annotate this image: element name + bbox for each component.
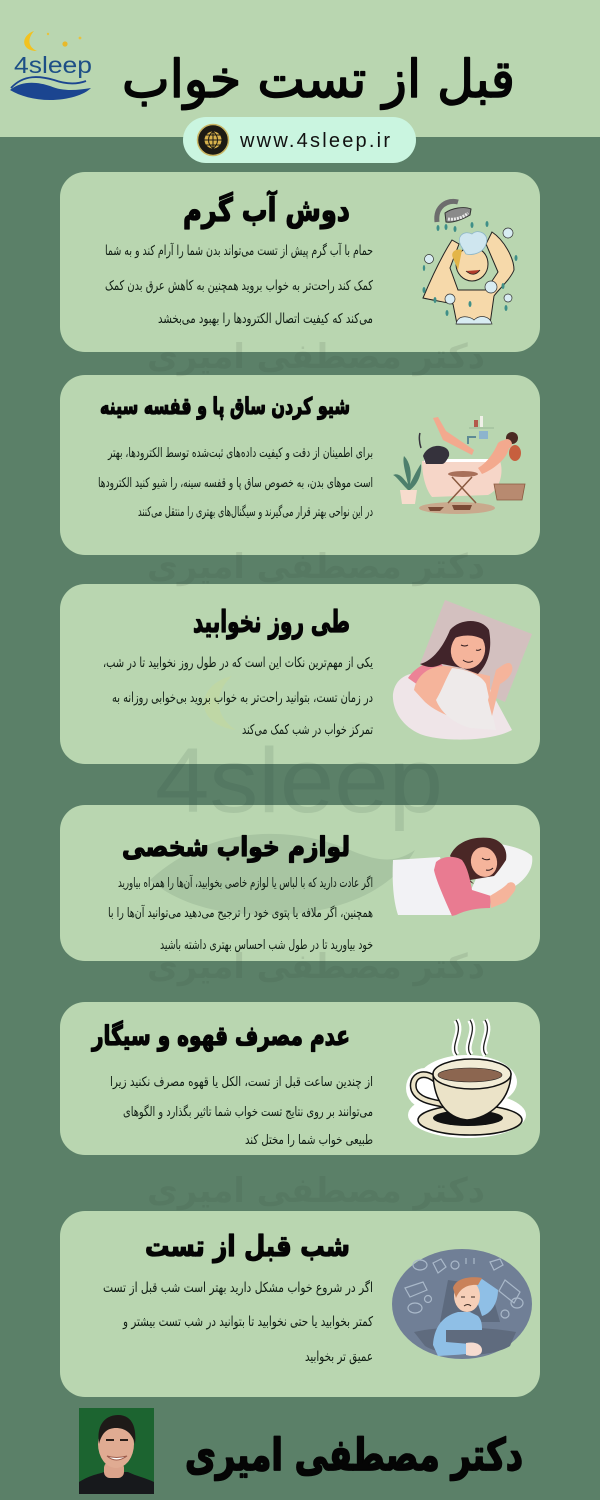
text: hot shower: می‌کند که کیفیت اتصال الکترودها را بهبود می‌بخشد (158, 311, 373, 327)
text: shaving (98, 446, 373, 520)
website address: www.4sleep.ir (239, 130, 390, 152)
watermark: large 4sleep logo: 4sleep (155, 730, 443, 832)
icon: woman sleeping under blanket (393, 838, 532, 916)
text: no coffee or cigarettes: می‌توانند بر روی نتایج تست خواب شما تاثیر بگذارد و الگوهای (123, 1104, 373, 1120)
text: personal sleep items: اگر عادت دارید که با لباس یا لوازم خاصی بخوابید، آن‌ها را همراه بیاورید (118, 874, 373, 891)
logo: 4sleep: 4sleep (14, 52, 92, 78)
panel: hot shower (60, 172, 540, 352)
watermark: author name repeats: دکتر مصطفی امیری (147, 1171, 485, 1211)
panel: shaving (60, 375, 540, 555)
header band (0, 0, 600, 137)
text: hot shower (105, 242, 373, 327)
website pill (183, 117, 416, 163)
watermark: large 4sleep logo (150, 676, 443, 915)
text: no daytime naps: یکی از مهم‌ترین نکات این است که در طول روز نخوابید تا در شب، (103, 655, 373, 671)
text: shaving: در این نواحی بهتر قرار می‌گیرند و سیگنال‌های بهتری را منتقل می‌کنند (138, 504, 373, 520)
icon: sleeping woman on pillow (393, 600, 532, 740)
watermark: author name repeats (147, 337, 485, 1211)
text: no daytime naps: تمرکز خواب در شب کمک می‌کند (242, 722, 373, 738)
text: shaving: است موهای بدن، به خصوص ساق پا و قفسه سینه، را شیو کنید الکترودها (98, 476, 373, 491)
heading: shaving: شیو کردن ساق پا و قفسه سینه (100, 394, 350, 420)
panel: no coffee or cigarettes (60, 1002, 540, 1155)
text: shaving: برای اطمینان از دقت و کیفیت داده‌های ثبت‌شده توسط الکترودها، بهتر (107, 446, 373, 461)
watermark: author name repeats: دکتر مصطفی امیری (147, 337, 485, 377)
heading: personal sleep items: لوازم خواب شخصی (122, 832, 350, 863)
panel: personal sleep items (60, 805, 540, 961)
text: no coffee or cigarettes: از چندین ساعت قبل از تست، الکل یا قهوه مصرف نکنید زیرا (110, 1075, 373, 1090)
panel: night before the test (60, 1211, 540, 1397)
icon: woman in bath (393, 416, 525, 514)
panel: no daytime naps (60, 584, 540, 764)
text: no coffee or cigarettes: طبیعی خواب شما را مختل کند (245, 1133, 373, 1148)
icon: coffee cup (406, 1020, 526, 1138)
heading: night before the test: شب قبل از تست (145, 1229, 350, 1263)
icon: globe (198, 124, 228, 156)
text: no daytime naps: در زمان تست، بتوانید راحت‌تر به خواب بروید بی‌خوابی روزانه به (112, 690, 373, 706)
text: no daytime naps (103, 655, 373, 738)
heading: hot shower: دوش آب گرم (183, 190, 350, 229)
text: hot shower: کمک کند راحت‌تر به خواب بروید همچنین به کاهش عرق بدن کمک (105, 278, 373, 294)
heading: no daytime naps: طی روز نخوابید (193, 605, 350, 640)
text: night before the test: عمیق تر بخوابید (305, 1349, 373, 1365)
title: قبل از تست خواب (122, 50, 515, 110)
watermark: author name repeats: دکتر مصطفی امیری (147, 547, 485, 587)
author photo (79, 1408, 154, 1494)
heading: no coffee or cigarettes: عدم مصرف قهوه و سیگار (91, 1020, 350, 1052)
text: night before the test: اگر در شروع خواب مشکل دارید بهتر است شب قبل از تست (103, 1279, 373, 1296)
watermark: author name repeats: دکتر مصطفی امیری (147, 947, 485, 987)
text: personal sleep items: خود بیاورید تا در طول شب احساس بهتری داشته باشید (160, 938, 373, 953)
icon: worried man in bed (392, 1249, 532, 1359)
text: night before the test: کمتر بخوابید یا حتی نخوابید تا بتوانید در شب تست بیشتر و (122, 1314, 373, 1330)
text: personal sleep items (108, 874, 373, 953)
text: night before the test (103, 1279, 373, 1365)
text: personal sleep items: همچنین، اگر ملافه یا پتوی خود را ترجیح می‌دهید می‌توانید آن‌ها را با (108, 904, 373, 921)
text: no coffee or cigarettes (110, 1075, 373, 1148)
text: hot shower: حمام با آب گرم پیش از تست می‌تواند بدن شما را آرام کند و به شما (105, 242, 373, 259)
logo: 4sleep (10, 31, 92, 100)
icon: man showering (422, 201, 518, 324)
